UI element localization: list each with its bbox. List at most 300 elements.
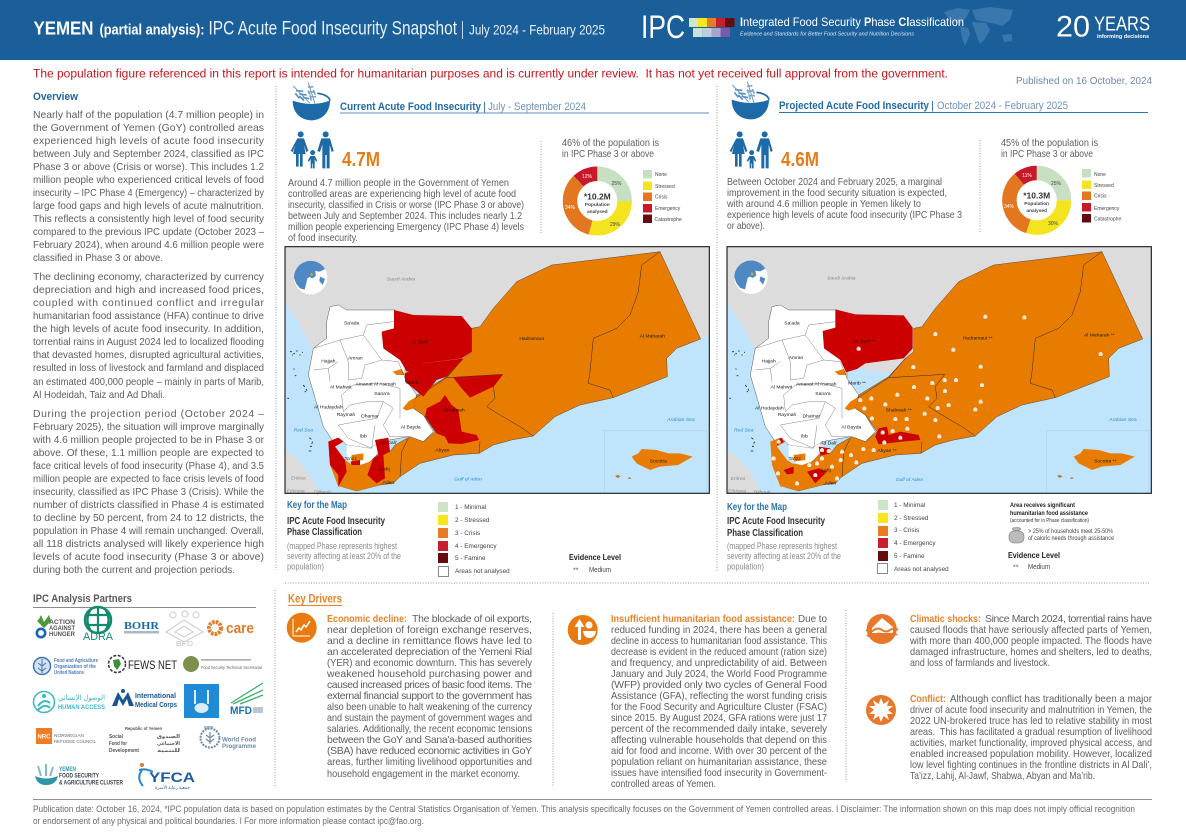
map labels: Socotra <box>650 459 667 465</box>
heading: projected: October 2024 - February 2025 <box>937 100 1068 112</box>
donut caption: in IPC Phase 3 or above <box>1001 149 1093 160</box>
donut caption: 45% of the population is <box>1001 138 1098 149</box>
logo: World Food Programme <box>200 725 256 750</box>
map labels: Marib ** <box>848 380 866 386</box>
driver text: economic decline: between the GoY and Sana'a-based authorities <box>327 735 532 746</box>
map labels: Amran <box>789 355 804 361</box>
logo: BFD: BFD <box>176 641 193 648</box>
map key: projected: 3 - Crisis <box>894 527 919 534</box>
map key: projected: ** <box>1013 564 1019 572</box>
driver text: conflict: areas. This has facilitated a gradual resumption of livelihood <box>910 727 1152 738</box>
donut legend: Emergency <box>655 206 681 212</box>
map key: projected: 5 - Famine <box>894 553 925 560</box>
logo: Human Access <box>34 692 105 712</box>
driver text: climatic shocks <box>909 614 1152 669</box>
driver text: economic decline: an accelerated depreciation of the Yemeni Rial <box>327 647 532 658</box>
map labels: Saudi Arabia <box>387 277 415 283</box>
driver text: insufficient humanitarian food assistance: (WFP) provided only two cycles of General Food <box>611 680 827 691</box>
donut legend: None <box>1094 172 1106 178</box>
map key: projected: > 25% of households meet 25-50% <box>1028 528 1113 535</box>
map labels: Al Mahwit <box>771 385 793 391</box>
map labels: Sana'a <box>815 391 831 397</box>
map labels: Al Hudaydah <box>314 405 343 411</box>
driver text: conflict: 2022 UN-brokered truce has led to relative stability in most <box>910 716 1152 727</box>
map key: projected: of caloric needs through assistance <box>1028 535 1114 542</box>
footer disclaimer <box>33 804 1135 826</box>
map key: projected: Medium <box>1028 564 1050 571</box>
map labels <box>728 276 1137 495</box>
projected summary text <box>726 177 962 232</box>
report title: YEMEN <box>34 18 94 38</box>
driver text: economic decline: near depletion of foreign exchange reserves, <box>327 625 532 636</box>
driver text: insufficient humanitarian food assistance: for the Food Security and Agriculture Cluster (FSAC) <box>611 702 827 713</box>
overview paragraph two: The declining economy, characterized by currency <box>33 272 265 283</box>
map key: projected: 4 - Emergency <box>894 540 936 547</box>
logo: MFD <box>230 683 263 717</box>
icon: family <box>291 131 334 168</box>
map labels: Eritrea <box>291 475 306 481</box>
donut caption <box>562 138 659 160</box>
map key: projected: Key for the Map <box>727 502 787 513</box>
driver text: economic decline: weakened household purchasing power and <box>326 669 532 680</box>
driver text: insufficient humanitarian food assistance: decline in access to humanitarian food assistance. This <box>611 636 827 647</box>
projected summary text: or above). <box>727 221 765 232</box>
map labels: Ibb <box>360 433 367 439</box>
map labels: Gulf of Aden <box>896 477 923 483</box>
map labels: Amanat Al Asimah <box>796 381 837 387</box>
driver text: insufficient humanitarian food assistance: percent of the recommended daily intake, severely <box>611 724 828 735</box>
icon: bowl with wheat <box>732 82 769 119</box>
map key: projected: Evidence Level <box>1008 550 1060 560</box>
map key: current: 3 - Crisis <box>455 530 480 537</box>
overview paragraph three: February 2025), the situation will improve marginally <box>33 422 265 433</box>
panel: current acute food insecurity <box>285 83 709 577</box>
map: current classification <box>285 247 709 495</box>
overview paragraph two: humanitarian food assistance (HFA) continue to drive <box>33 311 264 322</box>
map labels: Saudi Arabia <box>827 276 856 282</box>
logo: Human Access: الوصول الإنساني <box>58 693 105 702</box>
map key: projected: Areas not analysed <box>894 566 949 573</box>
driver text: insufficient humanitarian food assistance: affecting vulnerable households that depend on this <box>611 735 827 746</box>
overview paragraph one: Phase 3 or above (Crisis or worse). This includes 1.2 <box>33 162 264 173</box>
driver text: insufficient humanitarian food assistance: reduced funding in 2024, there has been a general <box>611 625 827 636</box>
logo: ADRA <box>83 607 114 643</box>
driver text: climatic shocks: caused floods that have seriously affected parts of Yemen, <box>910 625 1152 636</box>
map labels: Al Bayda <box>401 424 421 430</box>
logo: CARE: care <box>226 620 254 637</box>
driver text: economic decline: and a decline in remittance flows have led to <box>327 636 532 647</box>
heading: projected: | <box>931 100 934 112</box>
driver text: conflict: activities, market functionality, improved physical access, and <box>910 738 1152 749</box>
logo: Social Fund for Development: Fund for <box>109 741 127 747</box>
20 years badge: informing decisions <box>1097 34 1149 40</box>
driver text: insufficient humanitarian food assistance: January and July 2024, the World Food Programme <box>611 669 827 680</box>
icon: bowl with wheat <box>293 83 330 120</box>
overview paragraph three: during both the current and projection periods. <box>33 565 235 576</box>
donut chart: projected phases <box>1004 173 1064 228</box>
overview paragraph two <box>33 272 265 401</box>
donut legend: None <box>655 172 667 178</box>
donut legend: Catastrophe <box>1094 216 1121 222</box>
map labels: Ad Dali' <box>380 440 397 446</box>
headline figure 4.7M: 4.7M <box>342 149 380 171</box>
overview paragraph three: number of districts classified in Phase 4 is estimated <box>33 500 264 511</box>
logo: World Food Programme: World Food <box>222 736 256 744</box>
logo: Social Fund for Development: Development <box>109 748 139 754</box>
driver text: climatic shocks: Since March 2024, torrential rains have <box>985 614 1152 625</box>
logo: Norwegian Refugee Council: NRC <box>38 734 51 740</box>
overview heading: Overview <box>33 91 79 103</box>
logo: FAO: Food and Agriculture <box>54 658 98 664</box>
map labels: Al Bayda <box>841 425 862 431</box>
donut legend <box>643 170 682 223</box>
driver text: economic decline: salaries. Additionally, the recent economic tensions <box>327 724 532 735</box>
donut chart: projected phases: *10.3M <box>1023 190 1050 200</box>
driver text: conflict: low level fighting continues in the frontline districts in Al Dali’, <box>910 760 1152 771</box>
map key: projected: Area receives significant <box>1010 502 1076 509</box>
donut chart: current phases: Population <box>585 202 610 208</box>
map key: projected: Phase Classification <box>727 528 803 539</box>
logo: FAO: Organization of the <box>54 664 96 670</box>
publication date: Published on 16 October, 2024 <box>1016 76 1152 87</box>
overview paragraph three: to decline by 50 percent, from 24 to 12 districts, the <box>33 513 264 524</box>
overview paragraph two: torrential rains in August 2024 led to localized flooding <box>33 337 264 348</box>
map key: current: Key for the Map <box>287 500 347 511</box>
disclaimer notice in red: The population figure referenced in this report is intended for humanitarian purposes and is currently under review. It has not yet received full approval from the government. <box>33 66 948 80</box>
donut legend: Catastrophe <box>654 217 682 223</box>
driver text: insufficient humanitarian food assistance <box>611 614 828 790</box>
map labels: Abyan <box>435 447 450 453</box>
logo: Yemen Food Security and Agriculture Cluster: & AGRICULTURE CLUSTER <box>59 780 123 786</box>
map labels: Shabwah <box>444 408 465 414</box>
donut chart: current phases: 25% <box>611 181 622 187</box>
logo: Action Against Hunger: ACTION <box>49 619 75 626</box>
donut chart: current phases: 12% <box>582 174 593 180</box>
logo: World Food Programme: Programme <box>222 743 256 750</box>
driver text: insufficient humanitarian food assistance: Assistance (GFA), reflecting the worst funding crisis <box>611 691 827 702</box>
driver text: economic decline: (SBA) have reduced economic activities in GoY <box>327 746 532 757</box>
logo: BFD <box>166 611 203 648</box>
overview paragraph one: million people who experienced critical levels of food <box>33 175 264 186</box>
logo: Social Fund for Development <box>109 726 180 754</box>
map labels: Al Jawf ** <box>854 339 875 345</box>
map areas in Phase 4 <box>777 309 920 483</box>
donut chart: projected phases: 34% <box>1004 204 1015 210</box>
IPC logo: Evidence and Standards for Better Food Security and Nutrition Decisions <box>740 32 914 38</box>
logo: Yemen Food Security and Agriculture Cluster: FOOD SECURITY <box>59 772 99 780</box>
map labels: Marib <box>406 380 419 386</box>
report title: July 2024 - February 2025 <box>469 22 605 38</box>
logo: Norwegian Refugee Council: NORWEGIAN <box>54 733 85 739</box>
map key: current: 5 - Famine <box>455 555 486 562</box>
logo: YFCA: جمعية رعاية الأسرة <box>155 784 190 790</box>
overview paragraph one <box>33 110 265 264</box>
overview paragraph two: that devasted homes, disrupted agricultural activities, <box>33 350 264 361</box>
map key: current: 2 - Stressed <box>455 517 490 524</box>
driver text: climatic shocks: and loss of farmlands and livestock. <box>910 658 1050 669</box>
logo: blue mosque emblem <box>184 684 219 718</box>
logo: Yemen Food Security and Agriculture Cluster <box>35 764 123 786</box>
logo: CARE <box>209 620 254 637</box>
driver text: insufficient humanitarian food assistance: controlled areas of Yemen. <box>611 779 716 790</box>
logo: ADRA: ADRA <box>83 631 114 643</box>
current summary text: of food insecurity. <box>288 233 358 244</box>
driver text: economic decline: also been unable to halt weakening of the currency <box>327 702 533 713</box>
driver text: climatic shocks: damaged infrastructure, homes and shelters, led to deaths, <box>910 647 1152 658</box>
map labels: Dhamar <box>361 414 379 420</box>
overview paragraph two: the high levels of acute food insecurity. In addition, <box>33 324 264 335</box>
donut chart: current phases: *10.2M <box>584 192 611 202</box>
logo: Social Fund for Development: الاجتماعي <box>157 741 180 747</box>
overview paragraph three: with 4.6 million people projected to be in Phase 3 or <box>32 435 265 446</box>
current summary text <box>288 178 524 244</box>
map locator globe <box>734 261 768 294</box>
driver text: economic decline: areas, further limiting livelihood opportunities and <box>327 757 532 768</box>
driver text: climatic shocks: Climatic shocks: <box>910 614 981 625</box>
driver text: insufficient humanitarian food assistance: Due to <box>798 614 827 625</box>
report title: IPC Acute Food Insecurity Snapshot <box>208 18 458 40</box>
logo: Human Access: HUMAN ACCESS <box>58 704 105 711</box>
map areas in Phase 4 <box>328 310 503 487</box>
map key: current: Phase Classification <box>287 527 362 538</box>
map labels: Hajjah <box>321 358 336 364</box>
logo: FEWS NET <box>108 656 178 672</box>
map labels: Al Jawf <box>411 339 428 345</box>
map locator globe <box>294 261 327 294</box>
overview paragraph three: million people are expected to face crisis levels of food <box>33 474 264 485</box>
map labels: Ethiopia <box>287 488 305 494</box>
icon: family <box>730 131 773 168</box>
donut chart: projected phases: Population <box>1024 201 1049 207</box>
map labels: Sa'ada <box>344 321 360 327</box>
driver text: conflict: Although conflict has traditionally been a major <box>950 694 1152 705</box>
overview paragraph three: population in Phase 4 will remain unchanged. Overall, <box>33 526 264 537</box>
overview paragraph one: This reflects a consistently high level of food security <box>33 214 265 225</box>
map labels: Lahj <box>821 467 831 473</box>
20 years badge: 20 <box>1056 10 1090 44</box>
driver text: conflict <box>910 694 1152 782</box>
heading: projected <box>779 100 1148 113</box>
panel: IPC analysis partners <box>33 593 263 790</box>
donut caption: in IPC Phase 3 or above <box>562 149 654 160</box>
map labels: Al Maharah ** <box>1084 333 1115 339</box>
driver text: insufficient humanitarian food assistance: Insufficient humanitarian food assistance: <box>611 614 795 625</box>
overview paragraph one: the Government of Yemen (GoY) controlled areas <box>33 123 264 134</box>
driver text: insufficient humanitarian food assistance: and frequency, and unpredictability of aid. Between <box>611 658 827 669</box>
logo: FAO: United Nations <box>54 670 84 676</box>
driver text: economic decline: and sustain the payment of government wages and <box>327 713 532 724</box>
map key: projected <box>727 500 1114 574</box>
heading: projected: Projected Acute Food Insecurity <box>779 100 930 112</box>
map key: current: 1 - Minimal <box>455 504 486 511</box>
heading: current: | <box>483 101 486 113</box>
map labels: Djibouti <box>314 489 332 495</box>
driver text: insufficient humanitarian food assistance: aid for food and income. With over 30 percent of the <box>611 746 827 757</box>
current summary text: million people experiencing Emergency (IPC Phase 4) levels <box>288 222 524 233</box>
donut legend: Stressed <box>655 184 675 190</box>
map labels: Red Sea <box>294 428 313 434</box>
driver text: insufficient humanitarian food assistance: since 2015. By August 2024, GFA rations were just 17 <box>611 713 827 724</box>
donut caption <box>1001 138 1098 160</box>
map key: current: severity affecting at least 20% of the <box>287 551 401 561</box>
driver text: economic decline: (YER) and economic downturn. This has severely <box>327 658 533 669</box>
logo: International Medical Corps <box>112 689 177 709</box>
overview paragraph three: above. Of these, 1.1 million people are expected to <box>33 448 264 459</box>
map key: current: Evidence Level <box>569 552 621 562</box>
map labels: Gulf of Aden <box>454 477 482 483</box>
donut chart: projected phases: 11% <box>1022 173 1032 179</box>
overview paragraph two: resulted in loss of livestock and farmland and displaced <box>33 363 264 374</box>
icon: economic decline <box>287 613 317 643</box>
heading: current: July - September 2024 <box>488 101 586 113</box>
heading: current: Current Acute Food Insecurity <box>340 101 482 113</box>
logo: International Medical Corps: Medical Corps <box>135 700 177 709</box>
footer disclaimer: or endorsement of any physical and political boundaries. I For more information please contact ipc@fao.org. <box>33 816 424 826</box>
logo: World Food Programme: WFP <box>204 725 214 730</box>
driver text: economic decline: caused increased prices of basic food items. The <box>327 680 532 691</box>
overview paragraph three: face critical levels of food insecurity (Phase 4), and 3.5 <box>33 461 264 472</box>
overview paragraph two: Al Hodeidah, Taiz and Ad Dhali. <box>33 390 165 401</box>
logo: Social Fund for Development: Republic of Yemen <box>125 726 162 731</box>
panel: projected acute food insecurity <box>726 82 1151 574</box>
map key: projected: humanitarian food assistance <box>1010 510 1088 517</box>
map labels: Hadramaut ** <box>963 336 993 342</box>
logo: Norwegian Refugee Council <box>36 728 96 745</box>
logo: MFD: MFD <box>230 705 252 717</box>
donut chart: current phases <box>565 174 625 228</box>
map labels: Aden <box>383 480 394 486</box>
icon: conflict <box>866 695 896 725</box>
overview paragraph two: coupled with continued conflict and irregular <box>33 298 265 309</box>
map key: projected: IPC Acute Food Insecurity <box>727 516 825 527</box>
donut legend: Crisis <box>655 194 668 200</box>
driver text: insufficient humanitarian food assistance: population reliant on humanitarian assistance, these <box>611 757 827 768</box>
projected summary text: with around 4.6 million people in Yemen likely to <box>726 199 921 210</box>
overview paragraph three: insecurity, classified as IPC Phase 3 (Crisis). While the <box>33 487 264 498</box>
current summary text: between July and September 2024. This includes nearly 1.2 <box>288 211 522 222</box>
map key: current <box>287 500 621 576</box>
overview paragraph two: an estimated 400,000 people – mainly in parts of Marib, <box>33 377 264 388</box>
logo: Social Fund for Development: للتنمية <box>157 748 180 754</box>
heading: current <box>340 101 709 114</box>
map labels: Raymah <box>778 412 797 418</box>
map labels: Al Maharah <box>640 333 665 339</box>
map labels: Ta'izz <box>789 456 801 462</box>
logo: Action Against Hunger <box>37 615 75 638</box>
map labels: Aden <box>825 481 836 487</box>
driver text: economic decline: Economic decline: <box>327 614 407 625</box>
donut chart: projected phases: analysed <box>1026 208 1047 214</box>
logo: BOHR: BOHR <box>124 620 160 632</box>
donut caption: 46% of the population is <box>562 138 659 149</box>
map labels: Sana'a <box>374 391 390 397</box>
driver text: insufficient humanitarian food assistance: decrease is evident in the reduced amount (ration size) <box>611 647 827 658</box>
map labels: Ethiopia <box>728 489 746 495</box>
donut chart: projected phases: 25% <box>1051 181 1062 187</box>
map labels: Hadramaut <box>519 336 545 342</box>
map key: current: IPC Acute Food Insecurity <box>287 516 385 527</box>
overview paragraph three: levels of acute food insecurity (Phase 3 or above) <box>33 552 264 563</box>
map labels: Arabian Sea <box>666 417 695 423</box>
donut legend: Emergency <box>1094 206 1120 212</box>
donut legend: Stressed <box>1094 183 1114 189</box>
driver text: insufficient humanitarian food assistance: issues have intensified food insecurity in Government- <box>611 768 827 779</box>
projected summary text: experience high levels of acute food insecurity (IPC Phase 3 <box>727 210 962 221</box>
logo: International Medical Corps: International <box>135 691 176 700</box>
key drivers heading: Key Drivers <box>288 594 342 606</box>
logo: YFCA <box>139 763 195 790</box>
donut legend <box>1082 169 1121 222</box>
logo: YFCA: YFCA <box>149 769 195 785</box>
map labels: Al Hudaydah <box>755 405 784 411</box>
IPC logo: Integrated Food Security Phase Classification <box>740 15 964 29</box>
map labels: Shabwah ** <box>886 408 912 414</box>
driver text: climatic shocks: with more than 400,000 people impacted. The floods have <box>909 636 1152 647</box>
partners heading: IPC Analysis Partners <box>33 593 132 605</box>
current summary text: controlled areas are experiencing high level of acute food <box>288 189 516 200</box>
map key: current: Medium <box>589 567 611 574</box>
logo: Norwegian Refugee Council: REFUGEE COUNCIL <box>54 739 96 745</box>
logo: Action Against Hunger: HUNGER <box>49 631 75 638</box>
map labels: Ibb <box>801 433 808 439</box>
logo: Social Fund for Development: Social <box>109 734 124 740</box>
driver text: conflict: driver of acute food insecurity and malnutrition in Yemen, the <box>910 705 1152 716</box>
current summary text: Around 4.7 million people in the Government of Yemen <box>288 178 509 189</box>
logo: FAO <box>34 658 98 676</box>
overview paragraph one: large food gaps and high levels of acute malnutrition. <box>33 201 264 212</box>
map labels: Lahj <box>380 467 390 473</box>
report title <box>34 18 605 40</box>
map labels: Raymah <box>337 412 356 418</box>
map labels: Socotra ** <box>1094 459 1117 465</box>
current summary text: insecurity, classified in Crisis or worse (IPC Phase 3 or above) <box>288 200 524 211</box>
overview paragraph one: classified in Phase 3 or above. <box>33 253 163 264</box>
map key: projected: population) <box>727 562 764 572</box>
map labels: Arabian Sea <box>1108 417 1137 423</box>
driver text: economic decline: household engagement in the market economy. <box>327 769 520 780</box>
donut legend: Crisis <box>1094 194 1107 200</box>
map key: projected: 2 - Stressed <box>894 515 929 522</box>
map: projected classification <box>727 247 1151 495</box>
driver text: conflict: enabled increased population mobility. However, localized <box>910 749 1152 760</box>
map key: projected: severity affecting at least 20% of the <box>727 551 841 561</box>
map key: current: population) <box>287 562 324 572</box>
map labels: Ad Dali' <box>820 440 837 446</box>
driver text: economic decline <box>326 614 533 780</box>
overview paragraph one: between July and September 2024, classified as IPC <box>33 149 264 160</box>
logo: Food Security Technical Secretariat <box>183 656 263 672</box>
world map watermark <box>944 7 1013 46</box>
overview paragraph one: Nearly half of the population (4.7 million people) in <box>33 110 264 121</box>
donut chart: current phases: 34% <box>565 205 576 211</box>
logo: FEWS NET: FEWS NET <box>128 658 178 672</box>
driver text: conflict: Ta’izz, Lahij, Al-Jawf, Shabwa, Abyan and Ma’rib. <box>910 771 1095 782</box>
map labels: Djibouti <box>754 489 771 495</box>
map key: current: 4 - Emergency <box>455 543 497 550</box>
map labels: Abyan ** <box>877 448 897 454</box>
overview paragraph one: compared to the previous IPC update (October 2023 – <box>33 227 264 238</box>
driver text: conflict: Conflict: <box>910 694 946 705</box>
map labels: Ta'izz <box>345 456 357 462</box>
map key: current: (mapped Phase represents highest <box>287 541 397 551</box>
map key: projected: (accounted for in Phase classification) <box>1010 518 1089 524</box>
donut chart: current phases: analysed <box>587 209 608 215</box>
map labels: Amanat Al Asimah <box>355 381 396 387</box>
donut chart: current phases: 29% <box>610 222 621 228</box>
projected summary text: Between October 2024 and February 2025, a marginal <box>727 177 942 188</box>
overview paragraph three <box>32 409 265 576</box>
map key: projected: (mapped Phase represents highest <box>727 541 837 551</box>
